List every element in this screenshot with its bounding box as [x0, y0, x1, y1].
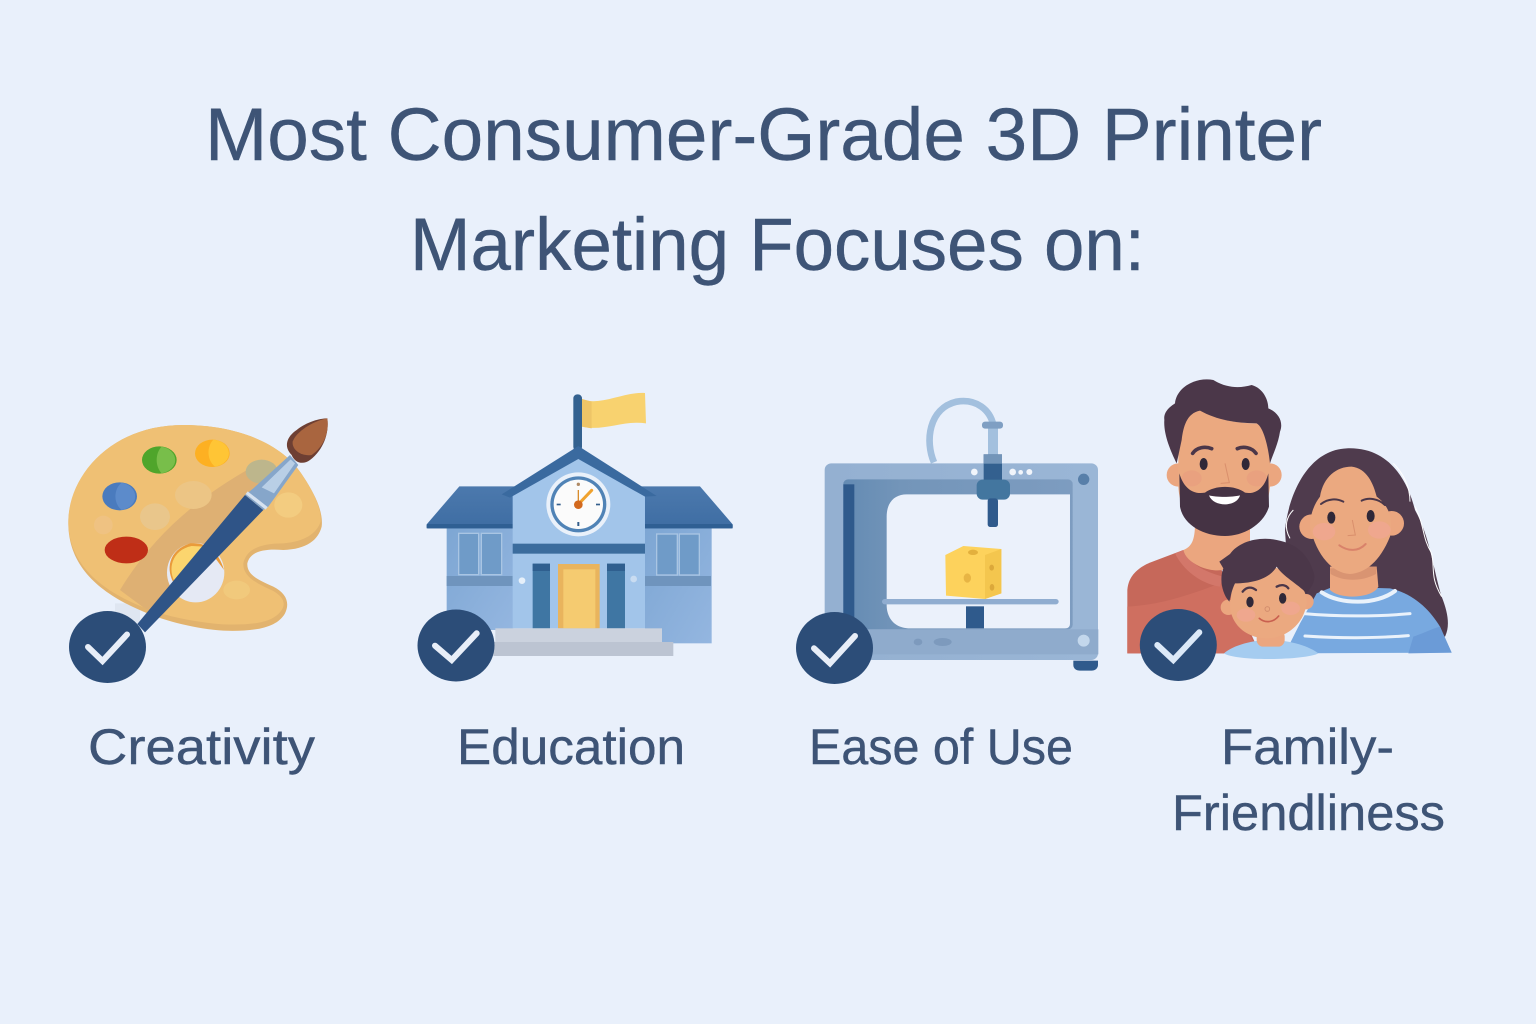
label: family-friendliness: Family-	[1221, 719, 1394, 775]
title: Most Consumer-Grade 3D Printer	[205, 93, 1322, 176]
label: family-friendliness: Friendliness	[1172, 785, 1445, 841]
icon: check badge creativity	[69, 611, 146, 683]
printed cheese cube	[945, 546, 1001, 599]
icon: check badge family	[1140, 609, 1217, 681]
father	[1127, 379, 1282, 653]
label: creativity: Creativity	[88, 719, 315, 775]
print head	[977, 422, 1010, 527]
child	[1219, 539, 1318, 659]
icon: family portrait	[1127, 379, 1452, 659]
label: education: Education	[457, 719, 685, 775]
mother	[1285, 463, 1452, 653]
title: Marketing Focuses on:	[410, 203, 1145, 286]
icon: check badge ease of use	[796, 612, 873, 684]
panel: ease of use	[796, 401, 1098, 775]
label: family-friendliness	[1172, 719, 1445, 841]
label: ease of use: Ease of Use	[809, 719, 1073, 775]
filament tube	[930, 401, 993, 462]
icon: school building	[427, 393, 733, 656]
panel: family-friendliness	[1127, 379, 1452, 841]
title	[205, 93, 1322, 286]
panel: creativity	[68, 418, 328, 775]
icon: check badge education	[418, 610, 494, 682]
icon: paint palette and brush	[68, 418, 328, 632]
woman hair	[1285, 448, 1448, 637]
flag	[573, 393, 646, 451]
panel: education	[418, 393, 733, 775]
icon: 3D printer	[825, 401, 1098, 671]
